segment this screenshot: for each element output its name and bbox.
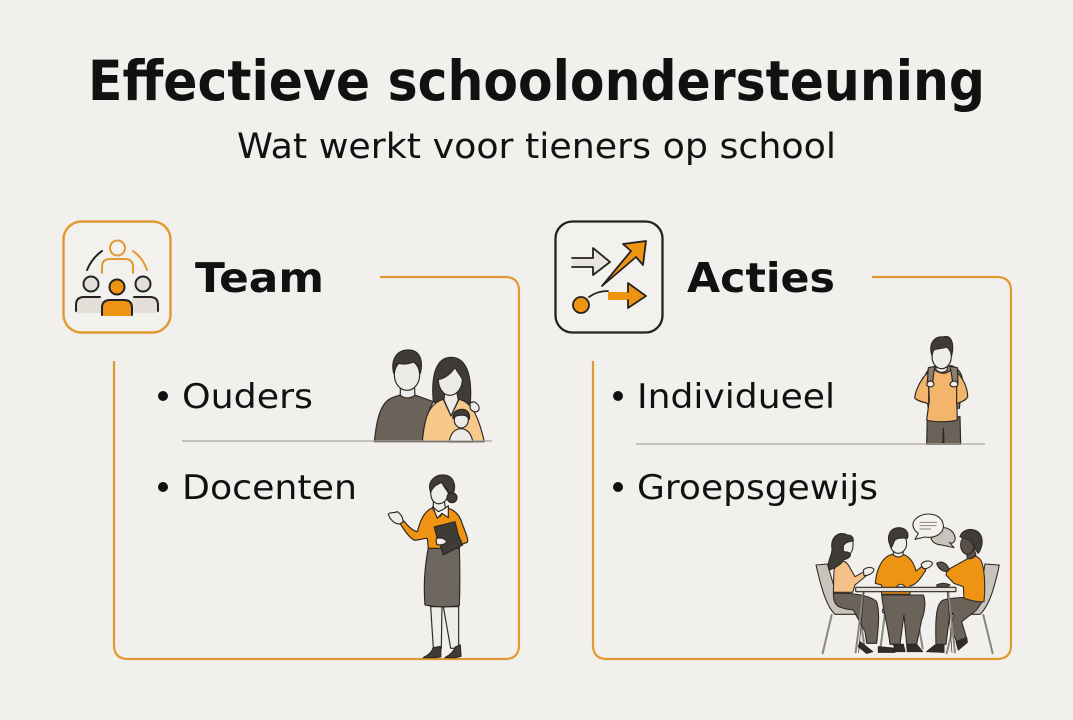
heading: team: Team [195, 254, 324, 302]
list item: groepsgewijs: Groepsgewijs [637, 468, 878, 508]
list item: ouders: Ouders [182, 377, 313, 417]
person right [936, 597, 983, 644]
illustration: parents with child [374, 350, 484, 442]
panel: team [64, 222, 519, 659]
icon: speech bubbles [913, 514, 955, 548]
list item: docenten: Docenten [182, 468, 357, 508]
heading: acties: Acties [687, 254, 835, 302]
divider: acties [636, 443, 985, 445]
illustration: student with backpack [915, 336, 968, 444]
title: Effectieve schoolondersteuning [88, 49, 985, 113]
illustration: group conversation at table [816, 514, 999, 653]
table [856, 592, 955, 652]
man centre [882, 595, 925, 644]
panel: acties [556, 222, 1011, 659]
subtitle: Wat werkt voor tieners op school [237, 127, 836, 167]
icon: team [64, 222, 170, 332]
divider: team [182, 440, 492, 442]
list item: individueel: Individueel [637, 377, 835, 417]
icon: actions arrows [556, 222, 662, 332]
illustration: teacher [388, 475, 468, 658]
panel frame: team [114, 277, 519, 659]
woman left [833, 593, 879, 643]
panel frame: acties [593, 277, 1011, 659]
